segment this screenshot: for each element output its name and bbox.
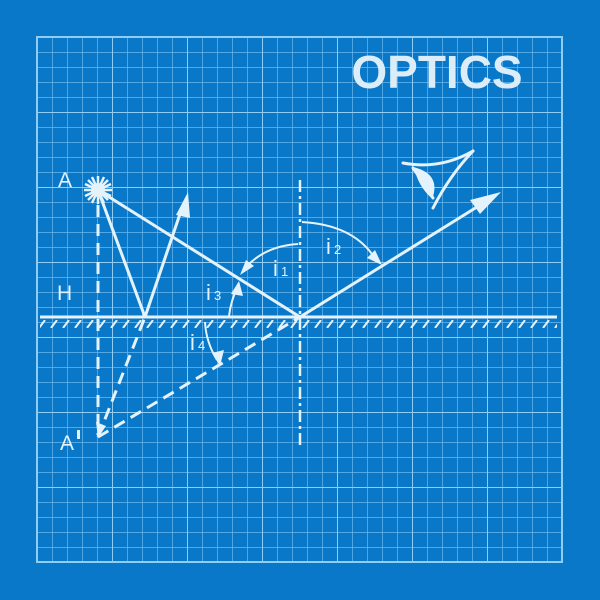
labels (57, 169, 341, 455)
dashed construction lines (98, 205, 300, 437)
source A star (84, 176, 112, 204)
rays (98, 190, 485, 317)
labels: 4 (198, 338, 205, 353)
labels: i (190, 330, 195, 355)
icon: eye (403, 151, 473, 208)
labels: i (326, 234, 331, 259)
labels: H (57, 282, 72, 305)
labels: 2 (334, 242, 341, 257)
normal line (299, 180, 301, 445)
labels: i (206, 280, 211, 305)
title: OPTICS (351, 46, 523, 98)
labels: 3 (214, 288, 221, 303)
labels: A (58, 169, 72, 192)
arrowheads (96, 192, 501, 438)
angle arcs (205, 222, 376, 360)
labels: i (273, 256, 278, 281)
labels: 1 (281, 264, 288, 279)
mirror (40, 317, 557, 328)
labels: A (60, 432, 74, 455)
